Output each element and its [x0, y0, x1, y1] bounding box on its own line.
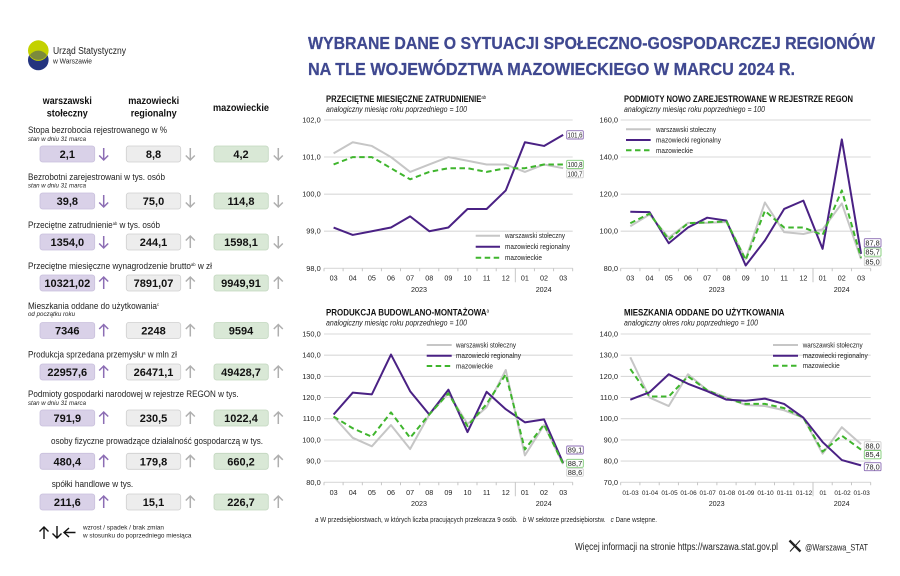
logo: Urząd Statystyczny w Warszawie: w Warszawie — [52, 56, 92, 65]
x axis labels — [330, 274, 567, 294]
x axis labels: 2024 — [536, 285, 552, 294]
y axis labels: 130,0 — [302, 372, 321, 381]
row: produkcja przemysłu: a — [143, 351, 146, 356]
row: przeciętne zatrudnienie: 244,1 — [140, 237, 167, 249]
x axis labels — [626, 274, 865, 294]
y axis labels — [600, 116, 618, 273]
end values: 85,7 — [865, 248, 880, 257]
chart heading — [624, 94, 853, 114]
row: osoby fizyczne: 480,4 — [54, 456, 82, 468]
y axis labels: 102,0 — [302, 116, 321, 124]
legend: mazowiecki regionalny — [803, 351, 868, 360]
x axis labels: 11 — [483, 488, 490, 497]
x axis labels: 02 — [540, 274, 548, 283]
row: mieszkania: 2248 — [141, 326, 166, 338]
end values: 88,7 — [568, 459, 582, 468]
row: przeciętne zatrudnienie: 1598,1 — [224, 237, 258, 249]
row: produkcja przemysłu: Produkcja sprzedana przemysłu — [28, 350, 156, 360]
chart heading: PRODUKCJA BUDOWLANO-MONTAŻOWA — [326, 308, 512, 318]
x axis labels: 01-09 — [738, 490, 755, 497]
x axis labels — [330, 488, 567, 508]
row: bezrobotni: 75,0 — [143, 196, 164, 208]
x axis labels: 01-03 — [854, 490, 870, 497]
row: wynagrodzenie: Przeciętne miesięczne wynagrodzenie brutto — [28, 261, 207, 271]
row: mieszkania: Mieszkania oddane do użytkowania — [28, 301, 170, 311]
y axis labels: 100,0 — [302, 190, 321, 199]
legend — [476, 231, 570, 262]
row: przeciętne zatrudnienie: 1354,0 — [50, 237, 84, 249]
x axis labels: 06 — [387, 488, 395, 497]
x axis labels: 01-03 — [622, 490, 639, 497]
column headers — [42, 96, 269, 120]
y axis labels: 130,0 — [600, 351, 618, 360]
x axis labels: 2023 — [411, 285, 427, 294]
legend: warszawski stołeczny — [802, 340, 863, 350]
x axis labels: 02 — [838, 274, 846, 283]
chart heading: analogiczny miesiąc roku poprzedniego = 100 — [326, 319, 467, 328]
row: wynagrodzenie: ab — [191, 262, 196, 267]
chart heading — [624, 308, 785, 328]
legend — [427, 340, 521, 370]
x axis labels: 10 — [761, 274, 769, 283]
x axis labels: 2023 — [709, 499, 725, 508]
end values: 78,0 — [865, 462, 880, 471]
x axis labels: 08 — [425, 274, 433, 283]
data lines — [630, 139, 861, 266]
row: podmioty REGON: Podmioty gospodarki narodowej w rejestrze REGON w tys. — [28, 389, 239, 399]
y axis labels: 140,0 — [600, 330, 618, 338]
legend: mazowieckie — [803, 361, 840, 370]
end values — [864, 238, 881, 266]
x axis labels: 09 — [444, 274, 452, 283]
end values: 87,8 — [865, 238, 880, 248]
row: stopa bezrobocia: stan w dniu 31 marca — [28, 136, 87, 143]
y axis labels: 160,0 — [600, 116, 618, 124]
x axis labels: 2024 — [536, 499, 552, 508]
x axis labels: 07 — [703, 274, 711, 283]
icon: X logo — [790, 540, 800, 552]
data lines — [630, 357, 861, 465]
row: przeciętne zatrudnienie — [28, 220, 283, 250]
y axis labels: 100,0 — [600, 227, 618, 236]
end values: 88,0 — [865, 441, 880, 450]
end values — [567, 130, 583, 178]
x axis labels: 11 — [483, 274, 490, 283]
row: podmioty REGON: stan w dniu 31 marca — [28, 400, 87, 407]
logo: Urząd Statystyczny w Warszawie — [28, 40, 126, 70]
x axis labels: 01-08 — [719, 490, 736, 497]
x axis labels: 01-11 — [777, 490, 793, 497]
x axis labels: 01-04 — [642, 490, 659, 497]
y axis labels: 99,0 — [306, 227, 321, 236]
row: produkcja przemysłu: 26471,1 — [134, 367, 173, 379]
row: osoby fizyczne: 660,2 — [227, 456, 255, 468]
footnotes: a W przedsiębiorstwach, w których liczba pracujących przekracza 9 osób. b W sektorze przedsiębiorstw. c Dane wstępne. — [315, 517, 657, 524]
y axis labels — [302, 330, 321, 487]
panel: chart produkcja budowlano-montażowa — [302, 308, 583, 508]
row: stopa bezrobocia: 2,1 — [60, 149, 75, 161]
x axis labels: 01 — [521, 488, 529, 497]
x axis labels: 03 — [559, 488, 567, 497]
row: spółki handlowe: spółki handlowe w tys. — [52, 479, 133, 489]
title: NA TLE WOJEWÓDZTWA MAZOWIECKIEGO W MARCU 2024 R. — [308, 58, 795, 79]
end values: 100,8 — [568, 160, 582, 169]
y axis labels: 140,0 — [600, 152, 618, 162]
row: osoby fizyczne: osoby fizyczne prowadzące działalność gospodarczą w tys. — [51, 436, 263, 446]
data lines — [334, 135, 563, 235]
x axis labels: 12 — [799, 274, 807, 283]
row: spółki handlowe: 226,7 — [227, 497, 255, 509]
y axis labels: 80,0 — [604, 264, 618, 273]
x axis labels: 09 — [742, 274, 750, 283]
row: przeciętne zatrudnienie: w tys. osób — [117, 220, 160, 230]
chart heading: analogiczny miesiąc roku poprzedniego = 100 — [624, 105, 765, 114]
x axis labels: 04 — [646, 274, 654, 283]
x axis labels: 08 — [425, 488, 433, 497]
row: produkcja przemysłu: 49428,7 — [221, 367, 261, 379]
x axis labels: 03 — [559, 274, 567, 283]
row: wynagrodzenie: 7891,07 — [134, 278, 173, 290]
row: bezrobotni: 39,8 — [57, 196, 78, 208]
x axis labels: 06 — [387, 274, 395, 283]
row: mieszkania: od początku roku — [28, 311, 76, 318]
row: podmioty REGON: 230,5 — [140, 413, 167, 425]
row: produkcja przemysłu: w mln zł — [145, 350, 177, 360]
column headers: mazowiecki — [128, 96, 179, 107]
row: mieszkania: 7346 — [55, 326, 80, 338]
row: przeciętne zatrudnienie: ab — [113, 221, 118, 226]
row: wynagrodzenie: 9949,91 — [221, 278, 261, 290]
x axis labels: 12 — [502, 274, 510, 283]
legend — [626, 125, 721, 155]
x axis labels: 04 — [349, 488, 357, 497]
row: bezrobotni: 114,8 — [228, 196, 254, 208]
x axis labels: 08 — [722, 274, 730, 283]
column headers: warszawski — [42, 96, 92, 107]
x axis labels: 2024 — [834, 499, 850, 508]
chart heading: ab — [481, 95, 486, 101]
y axis labels: 90,0 — [306, 457, 321, 466]
end values: 101,6 — [568, 130, 582, 140]
x axis labels: 01-10 — [757, 490, 774, 497]
y axis labels — [600, 330, 618, 487]
row: mieszkania: c — [157, 302, 160, 307]
row: stopa bezrobocia: 4,2 — [233, 149, 249, 161]
y axis labels: 140,0 — [302, 351, 321, 360]
end values — [567, 446, 583, 477]
row: wynagrodzenie: w zł — [196, 261, 212, 271]
x axis labels: 01 — [521, 274, 529, 283]
row: produkcja przemysłu — [28, 350, 283, 380]
x axis labels: 01-05 — [661, 490, 678, 497]
row: podmioty REGON: 791,9 — [54, 413, 81, 425]
panel: chart mieszkania oddane do użytkowania — [600, 308, 881, 508]
legend: warszawski stołeczny — [655, 125, 716, 134]
row: spółki handlowe: 15,1 — [143, 497, 164, 509]
y axis labels: 100,0 — [600, 414, 618, 423]
x axis labels: 07 — [406, 488, 414, 497]
column headers: regionalny — [131, 109, 177, 120]
arrow legend: w stosunku do poprzedniego miesiąca — [82, 532, 192, 539]
row: stopa bezrobocia: Stopa bezrobocia rejestrowanego w % — [28, 125, 167, 135]
row: przeciętne zatrudnienie: Przeciętne zatrudnienie — [28, 220, 122, 230]
panel: chart podmioty nowo zarejestrowane — [600, 94, 881, 294]
x axis labels: 03 — [330, 274, 338, 283]
y axis labels: 90,0 — [604, 435, 618, 444]
legend: mazowiecki regionalny — [456, 351, 521, 360]
chart heading — [326, 94, 486, 114]
x axis labels: 2023 — [709, 285, 725, 294]
x axis labels: 10 — [464, 488, 472, 497]
y axis labels: 80,0 — [604, 457, 618, 466]
end values: 89,1 — [568, 446, 582, 455]
row: spółki handlowe — [40, 479, 283, 510]
row: osoby fizyczne — [40, 436, 283, 469]
row: osoby fizyczne: 179,8 — [140, 456, 167, 468]
data lines — [334, 355, 563, 464]
x axis labels: 11 — [780, 274, 788, 283]
row: stopa bezrobocia — [28, 125, 283, 162]
row: podmioty REGON — [28, 389, 283, 426]
x axis labels: 10 — [464, 274, 472, 283]
x axis labels: 03 — [857, 274, 865, 283]
x axis labels: 01 — [819, 274, 827, 283]
y axis labels — [302, 116, 321, 273]
row: wynagrodzenie — [28, 261, 283, 291]
row: mieszkania: 9594 — [229, 326, 254, 338]
y axis labels: 98,0 — [306, 264, 321, 273]
end values: 100,7 — [568, 170, 582, 178]
x axis labels — [622, 490, 870, 508]
x axis labels: 2023 — [411, 499, 427, 508]
chart heading — [326, 308, 489, 328]
chart heading: PRZECIĘTNE MIESIĘCZNE ZATRUDNIENIE — [326, 94, 513, 104]
x axis labels: 09 — [444, 488, 452, 497]
end values: 85,0 — [865, 257, 880, 266]
row: bezrobotni — [28, 172, 283, 209]
chart heading: PODMIOTY NOWO ZAREJESTROWANE W REJESTRZE REGON — [624, 94, 853, 104]
x axis labels: 06 — [684, 274, 692, 283]
x axis labels: 04 — [349, 274, 357, 283]
column headers: stołeczny — [47, 109, 88, 120]
x axis labels: 02 — [540, 488, 548, 497]
row: stopa bezrobocia: 8,8 — [146, 149, 161, 161]
x axis labels: 2024 — [834, 285, 850, 294]
y axis labels: 100,0 — [302, 435, 321, 444]
legend: mazowiecki regionalny — [656, 136, 721, 144]
footer: X handle: @Warszawa_STAT — [805, 543, 868, 554]
row: spółki handlowe: 211,6 — [54, 497, 81, 509]
end values: 88,6 — [568, 468, 582, 477]
x axis labels: 12 — [502, 488, 510, 497]
y axis labels: 150,0 — [302, 330, 321, 338]
panel: regional indicators table — [28, 96, 283, 510]
y axis labels: 110,0 — [600, 393, 618, 402]
row: produkcja przemysłu: 22957,6 — [47, 367, 87, 379]
x axis labels: 05 — [665, 274, 673, 283]
row: wynagrodzenie: 10321,02 — [44, 278, 90, 290]
row: bezrobotni: Bezrobotni zarejestrowani w tys. osób — [28, 172, 165, 182]
logo: Urząd Statystyczny w Warszawie: Urząd Statystyczny — [53, 46, 126, 57]
x axis labels: 05 — [368, 274, 376, 283]
chart heading: a — [487, 309, 489, 315]
row: bezrobotni: stan w dniu 31 marca — [28, 182, 87, 190]
x axis labels: 07 — [406, 274, 414, 283]
legend: mazowieckie — [656, 146, 693, 155]
legend: mazowieckie — [456, 362, 493, 370]
row: podmioty REGON: 1022,4 — [224, 413, 259, 425]
x axis labels: 01 — [819, 490, 827, 497]
arrow legend — [40, 524, 192, 539]
chart heading: analogiczny miesiąc roku poprzedniego = 100 — [326, 105, 467, 114]
x axis labels: 01-12 — [796, 490, 813, 497]
legend — [773, 340, 868, 370]
x axis labels: 01-02 — [834, 490, 851, 497]
panel: chart przeciętne zatrudnienie — [302, 94, 583, 294]
y axis labels: 110,0 — [303, 414, 321, 423]
footer: website link: Więcej informacji na stronie https://warszawa.stat.gov.pl — [575, 542, 778, 553]
chart heading: MIESZKANIA ODDANE DO UŻYTKOWANIA — [624, 308, 785, 318]
y axis labels: 101,0 — [302, 152, 321, 162]
legend: mazowiecki regionalny — [505, 242, 570, 251]
row: mieszkania — [28, 301, 283, 338]
y axis labels: 120,0 — [600, 372, 618, 381]
legend: warszawski stołeczny — [504, 231, 565, 240]
chart heading: analogiczny okres roku poprzedniego = 100 — [624, 319, 758, 328]
column headers: mazowieckie — [213, 103, 269, 114]
end values — [864, 441, 881, 471]
x axis labels: 01-07 — [700, 490, 716, 497]
x axis labels: 01-06 — [680, 490, 697, 497]
end values: 85,4 — [865, 450, 880, 459]
y axis labels: 70,0 — [604, 478, 618, 487]
y axis labels: 120,0 — [302, 393, 321, 402]
x axis labels: 03 — [330, 488, 338, 497]
x axis labels: 03 — [626, 274, 634, 283]
x axis labels: 05 — [368, 488, 376, 497]
y axis labels: 120,0 — [600, 190, 618, 199]
legend: warszawski stołeczny — [455, 340, 516, 350]
title — [308, 32, 875, 79]
y axis labels: 80,0 — [306, 478, 321, 487]
arrow legend: wzrost / spadek / brak zmian — [82, 524, 164, 532]
legend: mazowieckie — [505, 253, 542, 262]
